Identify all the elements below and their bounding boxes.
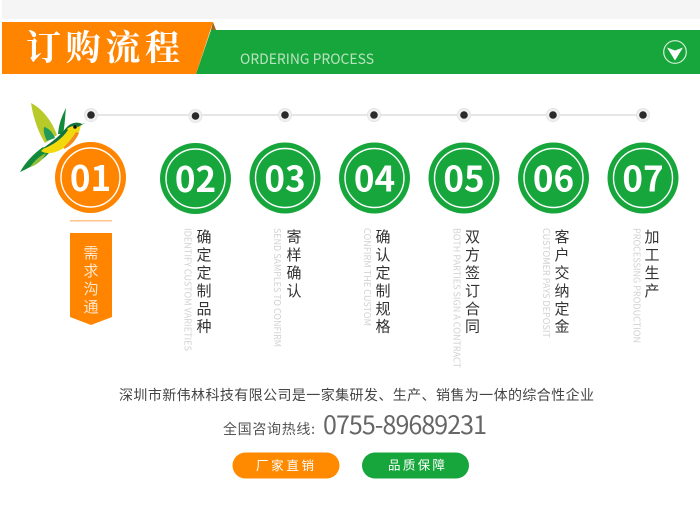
button: quality guarantee: 品质保障 xyxy=(388,454,445,474)
step 03: SEND SAMPLES TO CONFIRM xyxy=(271,228,284,347)
step 01 divider xyxy=(70,220,112,222)
button: factory direct: 厂家直销 xyxy=(256,455,314,474)
step 02 xyxy=(160,143,231,351)
step 02: IDENTIFY CUSTOM VARIETIES xyxy=(182,228,194,351)
step 01 badge: 01 xyxy=(70,151,111,202)
step 03: 03 xyxy=(264,152,306,202)
step 07: 07 xyxy=(622,152,664,202)
step 06: 06 xyxy=(533,152,574,202)
step 01 badge xyxy=(55,142,126,213)
orange title tab xyxy=(2,22,213,74)
step 04: 04 xyxy=(354,152,395,202)
step 05: 05 xyxy=(443,152,485,202)
step 05: BOTH PARTIES SIGN A CONTRACT xyxy=(450,228,464,369)
title: 订购流程 xyxy=(26,21,180,71)
icon: hummingbird xyxy=(20,103,85,172)
step 06 xyxy=(518,142,589,339)
timeline xyxy=(84,108,650,122)
green header bar xyxy=(196,30,700,74)
header banner xyxy=(2,21,700,74)
icon: down arrow xyxy=(664,41,686,63)
hotline xyxy=(223,406,487,442)
step 01 ribbon xyxy=(70,233,112,325)
step 05 xyxy=(428,142,500,369)
step 05: 双方签订合同 xyxy=(462,229,483,336)
step 07: 加工生产 xyxy=(642,229,662,301)
step 06: CUSTOMER PAYS DEPOSIT xyxy=(540,228,553,339)
step 03 xyxy=(250,142,320,347)
step 06: 客户交纳定金 xyxy=(552,229,572,336)
step 07 xyxy=(608,142,678,343)
step 04: 确认定制规格 xyxy=(372,229,394,336)
step 02: 02 xyxy=(175,152,216,203)
hotline: 0755-89689231 xyxy=(323,406,487,442)
subtitle: ORDERING PROCESS xyxy=(240,48,374,69)
step 04: CONFIRM THE CUSTOM xyxy=(361,228,374,326)
step 02: 确定定制品种 xyxy=(194,229,214,336)
step 07: PROCESSING PRODUCTION xyxy=(630,228,644,343)
hotline: 全国咨询热线: xyxy=(223,419,315,439)
step 01 xyxy=(55,142,126,325)
step 03: 寄样确认 xyxy=(284,228,304,301)
button: factory direct xyxy=(232,452,340,478)
step 04 xyxy=(339,142,410,336)
button: quality guarantee xyxy=(362,452,469,478)
company description: 深圳市新伟林科技有限公司是一家集研发、生产、销售为一体的综合性企业 xyxy=(119,385,594,405)
step 01 ribbon: 需求沟通 xyxy=(80,245,102,317)
